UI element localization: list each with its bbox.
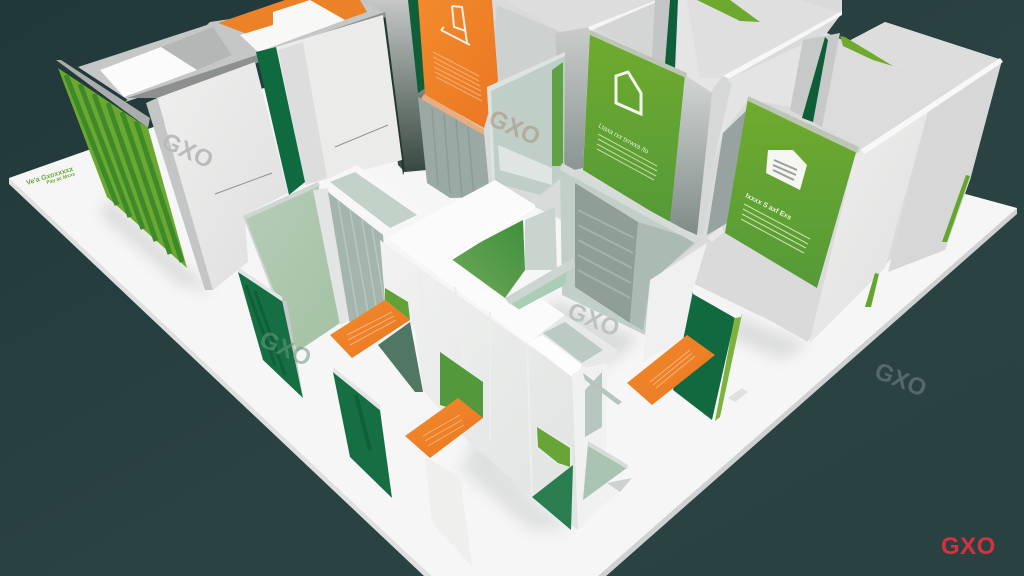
left glass booth <box>243 165 423 352</box>
small glass tower <box>528 315 632 530</box>
icon: hanging L shape <box>441 6 470 45</box>
green sticks <box>942 175 970 242</box>
green door lower left <box>333 367 392 498</box>
striped panel under orange poster <box>418 97 490 198</box>
watermarks: GXO <box>871 358 930 403</box>
orange poster text lines <box>433 52 482 101</box>
small floor puck <box>728 388 748 402</box>
center right glass bay <box>560 163 724 362</box>
watermarks: GXO <box>564 298 623 343</box>
orange shelf 3 <box>627 335 715 405</box>
green poster with house icon <box>583 30 712 235</box>
poster text: Ltaxa rxx txrwxa /to <box>597 123 650 156</box>
green poster with envelope icon <box>725 96 859 288</box>
watermarks: GXO <box>158 128 217 174</box>
logo: GXO: GXO <box>941 533 996 560</box>
glass panel right of orange <box>487 52 565 195</box>
small green panel and dark green triangle <box>532 425 573 530</box>
poster text: Ixxxx S axf Exs <box>744 193 792 222</box>
watermarks: GXO <box>485 105 544 151</box>
upper right bay <box>687 0 842 238</box>
far right booth <box>705 22 1003 344</box>
green panels behind orange shelves <box>385 288 483 418</box>
white pedestal <box>425 457 472 566</box>
backing wall of the back row <box>420 0 1002 340</box>
green door far left <box>238 267 303 398</box>
back column and dark stripe <box>360 0 427 175</box>
central white block <box>378 180 578 530</box>
green door right <box>673 287 742 421</box>
floor caption: Ve'a Gxoxxxxx <box>26 166 74 187</box>
watermarks <box>158 105 930 403</box>
top surfaces of the back row <box>489 0 725 172</box>
icon: house outline <box>616 72 641 114</box>
watermarks: GXO <box>256 326 315 372</box>
orange poster <box>418 0 498 135</box>
floor caption: Pay ac Mxxx <box>46 171 76 186</box>
green slatted wall <box>58 68 187 268</box>
icon: envelope <box>766 150 807 190</box>
left booth block <box>56 0 402 290</box>
orange shelf 2 <box>405 398 483 458</box>
orange shelf 1 <box>330 300 410 358</box>
